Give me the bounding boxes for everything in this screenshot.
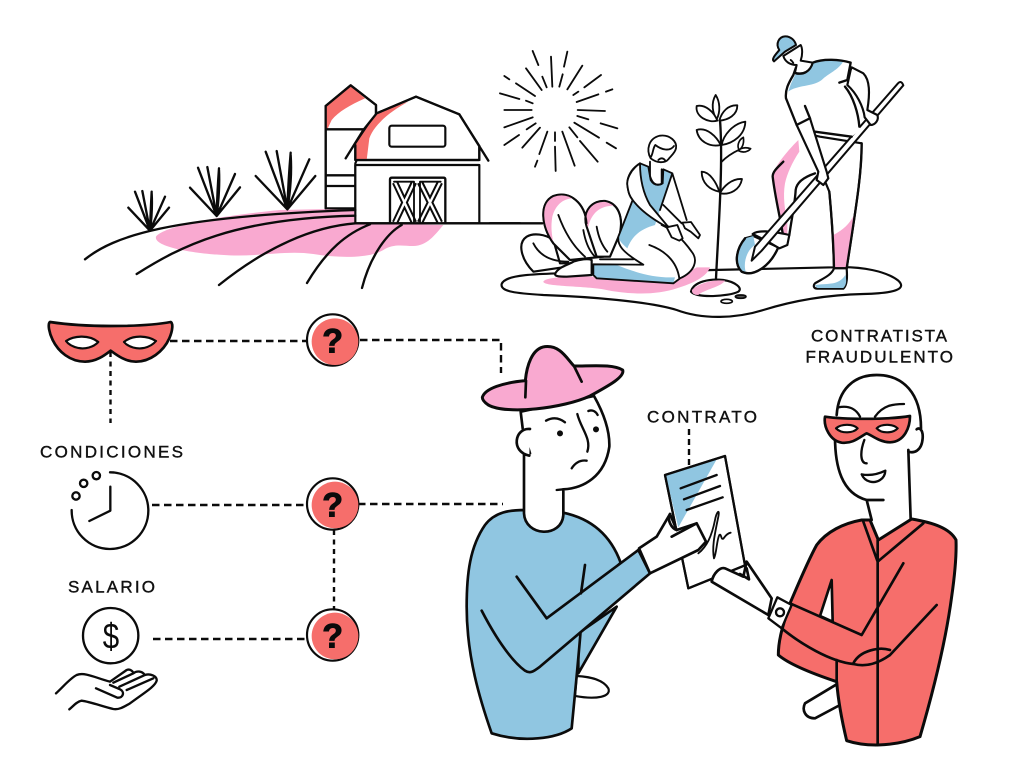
farm scene: barn, silo and field [85, 85, 520, 288]
sapling [697, 95, 751, 278]
farmer leg [578, 607, 617, 673]
label: contratista fraudulento: CONTRATISTA [811, 327, 948, 346]
ground line [355, 220, 520, 227]
farmer hat [482, 347, 623, 410]
woman dress [618, 163, 672, 248]
man foot on shovel [753, 231, 789, 248]
farmer head and neck [521, 396, 609, 532]
horizon line [490, 220, 542, 227]
contractor head outline [835, 375, 923, 520]
bush [521, 195, 621, 272]
icon: clock [72, 472, 148, 549]
left flow diagram: mask, conditions, salary and question marks [49, 314, 503, 709]
farmer [467, 347, 706, 739]
contractor cuff [768, 597, 792, 628]
man shirt [786, 60, 860, 137]
woman lower leg colour [593, 265, 675, 283]
sun [500, 51, 617, 171]
label: salario: SALARIO [68, 578, 155, 597]
field furrows [85, 210, 402, 288]
icon: question mark 1 [307, 314, 358, 366]
farmer hand [639, 514, 706, 573]
label: contratista fraudulento: FRAUDULENTO [806, 347, 953, 366]
icon: question mark 2: ? [322, 487, 343, 525]
contractor mask [825, 416, 910, 443]
label: contrato: CONTRATO [647, 408, 757, 427]
contract leader line [688, 429, 690, 466]
icon: question mark 1: ? [322, 323, 343, 361]
silo [326, 85, 376, 208]
farmer face [546, 410, 599, 490]
farmer arm [482, 550, 650, 672]
contractor clothing lines [782, 522, 937, 745]
farmer torso [467, 510, 621, 739]
barn door [390, 178, 445, 223]
dashed connector lines [110, 340, 503, 639]
kneeling woman [555, 136, 700, 283]
contractor body [778, 519, 956, 745]
plant large [256, 151, 315, 209]
man shoe [814, 268, 847, 289]
woman head [648, 136, 676, 162]
icon: dollar coin: $ [103, 616, 119, 656]
contractor hand [712, 562, 772, 615]
contractor arm gap [820, 580, 833, 622]
man left arm [797, 118, 828, 185]
shovel handle [752, 82, 903, 261]
woman body lines [593, 163, 695, 283]
signature [698, 512, 731, 558]
man head and cap [783, 45, 813, 73]
woman silhouette [593, 163, 695, 283]
man left leg [773, 138, 817, 235]
contractor lower arm behind [804, 683, 840, 718]
woman arm [627, 163, 670, 228]
man lower body [737, 133, 862, 289]
woman hands [667, 222, 700, 241]
planting mound and stones [691, 280, 746, 303]
woman foot [555, 259, 592, 277]
gardening scene: sun, bushes, kneeling woman, sapling and man with shovel [490, 36, 903, 317]
shovel blade [737, 236, 778, 273]
icon: question mark 2 [307, 478, 358, 530]
barn [346, 97, 488, 223]
contract document [665, 456, 745, 588]
icon: red mask [49, 322, 172, 362]
label: contratista fraudulento [806, 327, 953, 366]
icon: question mark 3: ? [322, 618, 343, 656]
ground patch [502, 267, 901, 317]
plant medium [190, 167, 240, 216]
contractor head fill [835, 375, 921, 540]
man right leg [805, 133, 862, 268]
man with shovel [737, 36, 903, 289]
pink field [156, 208, 443, 257]
pink soil [543, 267, 710, 293]
icon: open hand [56, 670, 157, 709]
man upper body [773, 36, 878, 185]
contractor face [838, 404, 904, 482]
plant small [128, 191, 169, 231]
icon: dollar coin [83, 608, 138, 663]
farmer foot [575, 676, 609, 698]
fraudulent contractor [712, 375, 956, 745]
icon: question mark 3 [307, 609, 358, 661]
man right arm [847, 67, 878, 125]
label: condiciones: CONDICIONES [40, 442, 183, 461]
